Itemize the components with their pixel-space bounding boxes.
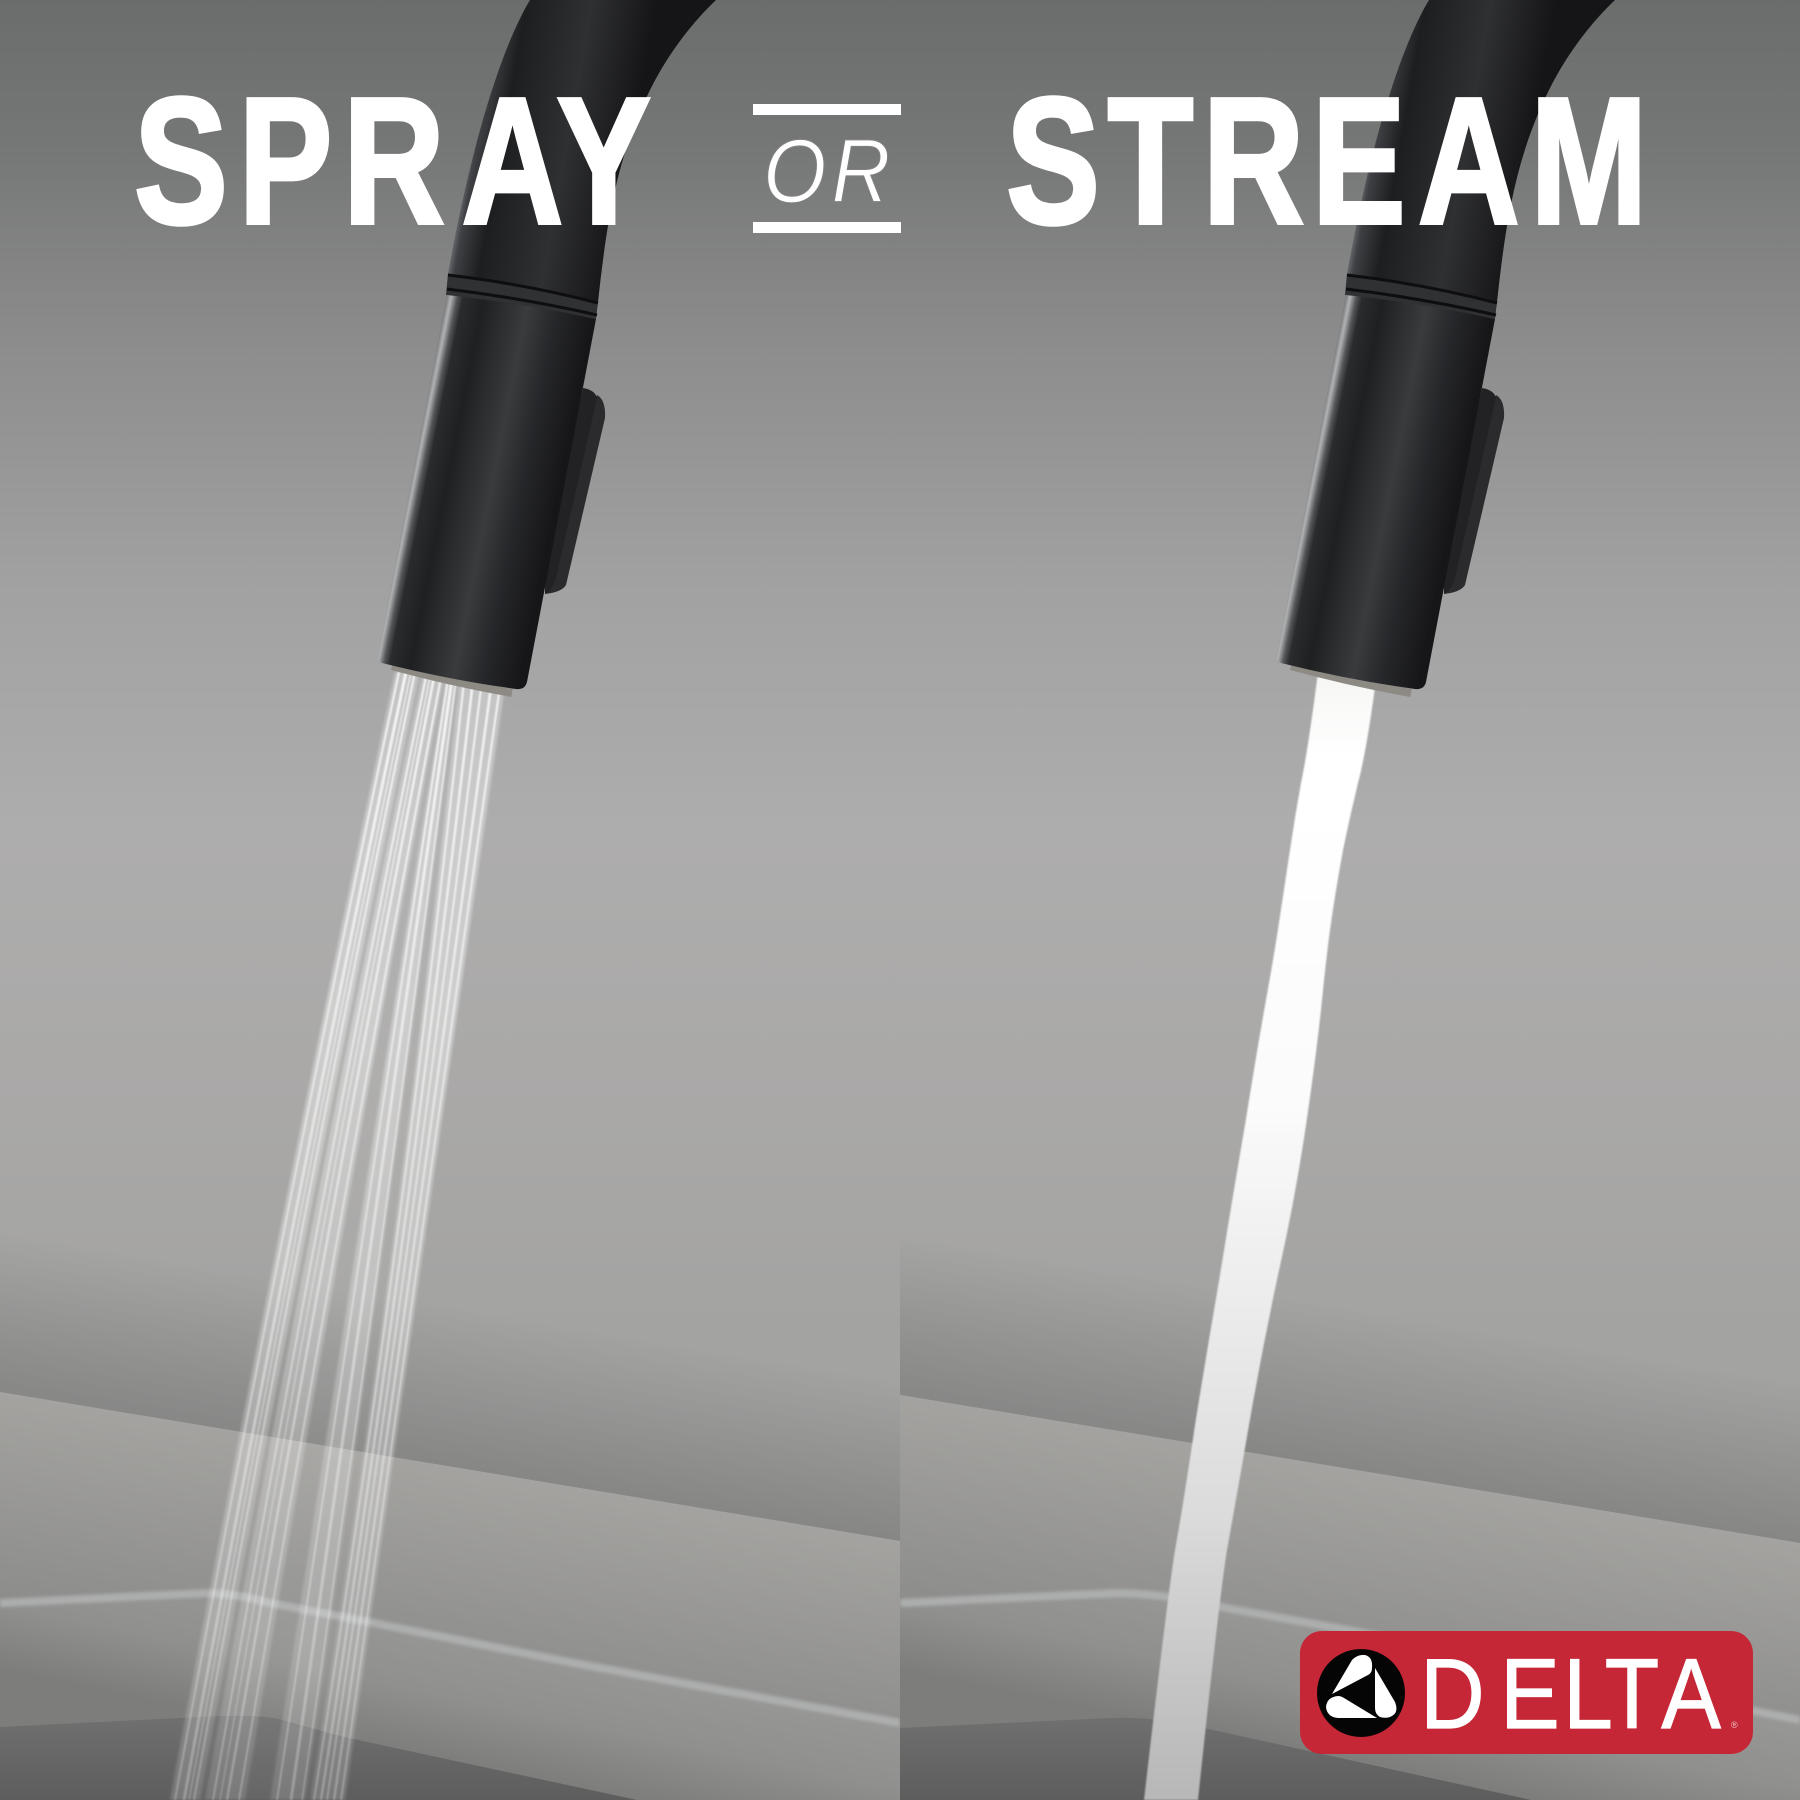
wall shadow above sink xyxy=(0,1279,900,1541)
spray haze xyxy=(170,672,507,1800)
background wall xyxy=(0,0,900,1541)
divider and OR label xyxy=(753,104,901,233)
spray streaks xyxy=(175,672,502,1800)
faucet: spray xyxy=(378,0,716,693)
wall shadow above sink xyxy=(900,1282,1800,1543)
water stream xyxy=(1144,672,1377,1800)
sink inner wall xyxy=(0,1646,748,1800)
spray bundles xyxy=(170,672,507,1800)
heading: STREAM: STREAM xyxy=(1006,61,1647,262)
panel: stream xyxy=(900,0,1800,1800)
heading: SPRAY: SPRAY xyxy=(134,61,651,262)
sink edge highlight xyxy=(0,1593,900,1723)
registered mark: ® xyxy=(1731,1720,1738,1730)
panel: spray xyxy=(0,0,900,1800)
logo wordmark: DELTA xyxy=(1420,1639,1721,1749)
divider and OR label: OR xyxy=(763,121,890,222)
background wall xyxy=(900,0,1800,1543)
sink basin xyxy=(0,1716,637,1800)
sink inner wall xyxy=(900,1646,1650,1800)
sink rim xyxy=(0,1462,900,1723)
logo: Delta xyxy=(1300,1631,1753,1754)
faucet: stream xyxy=(1277,0,1615,693)
sink rim xyxy=(900,1464,1800,1720)
icon: Delta triangle mark xyxy=(1317,1649,1405,1737)
water spray xyxy=(170,672,507,1800)
sink basin xyxy=(900,1718,1531,1800)
sink edge highlight xyxy=(900,1593,1800,1720)
